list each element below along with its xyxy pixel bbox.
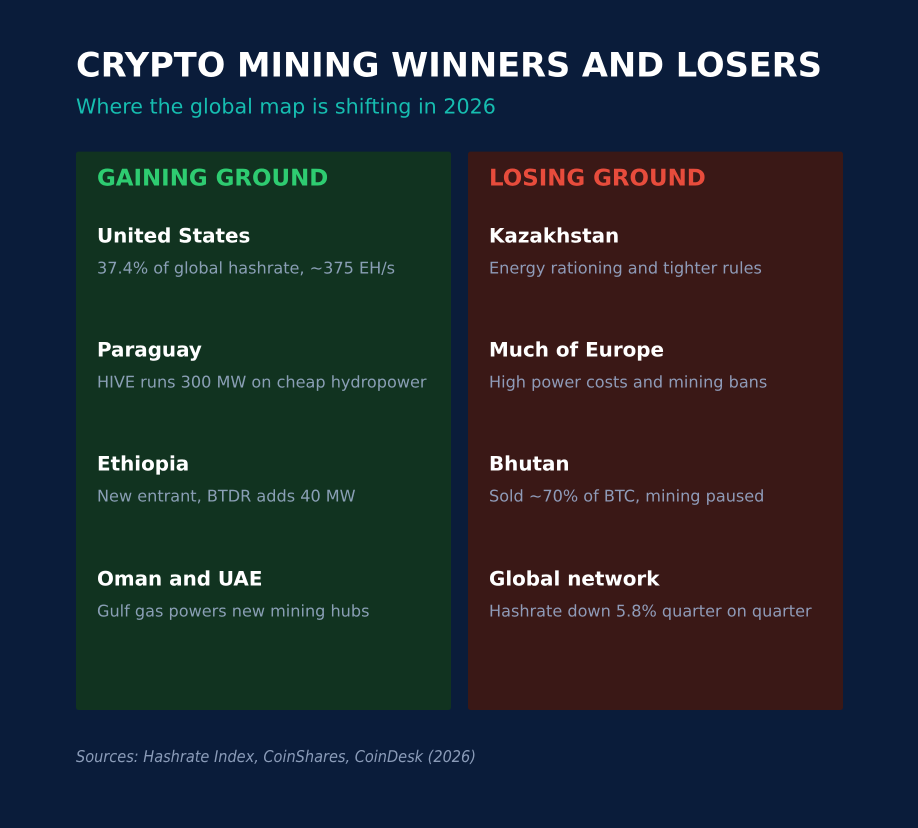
item: Kazakhstan: Kazakhstan [489, 224, 619, 247]
item: Global network: Hashrate down 5.8% quarter on quarter [489, 601, 812, 620]
item: United States [97, 224, 395, 277]
item: Bhutan: Sold ~70% of BTC, mining paused [489, 486, 764, 505]
panel: losing ground [468, 152, 843, 710]
item: Bhutan [489, 452, 764, 505]
heading: gaining ground: GAINING GROUND [97, 166, 328, 192]
subtitle: Where the global map is shifting in 2026 [76, 94, 496, 118]
item: Paraguay: HIVE runs 300 MW on cheap hydropower [97, 372, 427, 391]
item: Ethiopia: Ethiopia [97, 452, 189, 475]
item: Paraguay [97, 338, 427, 391]
item: Much of Europe: High power costs and mining bans [489, 372, 767, 391]
item: Much of Europe: Much of Europe [489, 338, 664, 361]
item: Much of Europe [489, 338, 767, 391]
item: Kazakhstan: Energy rationing and tighter rules [489, 258, 762, 277]
item: Ethiopia [97, 452, 356, 505]
item: Paraguay: Paraguay [97, 338, 202, 361]
heading: losing ground: LOSING GROUND [489, 166, 706, 192]
panel: gaining ground [76, 152, 451, 710]
item: Bhutan: Bhutan [489, 452, 570, 475]
item: Global network [489, 567, 812, 620]
item: Oman and UAE: Oman and UAE [97, 567, 262, 590]
item: United States: United States [97, 224, 250, 247]
title: CRYPTO MINING WINNERS AND LOSERS [76, 46, 822, 84]
item: Ethiopia: New entrant, BTDR adds 40 MW [97, 486, 356, 505]
item: United States: 37.4% of global hashrate, ~375 EH/s [97, 258, 395, 277]
item: Kazakhstan [489, 224, 762, 277]
item: Oman and UAE: Gulf gas powers new mining hubs [97, 601, 369, 620]
item: Oman and UAE [97, 567, 369, 620]
item: Global network: Global network [489, 567, 660, 590]
sources: Sources: Hashrate Index, CoinShares, CoinDesk (2026) [76, 747, 476, 766]
